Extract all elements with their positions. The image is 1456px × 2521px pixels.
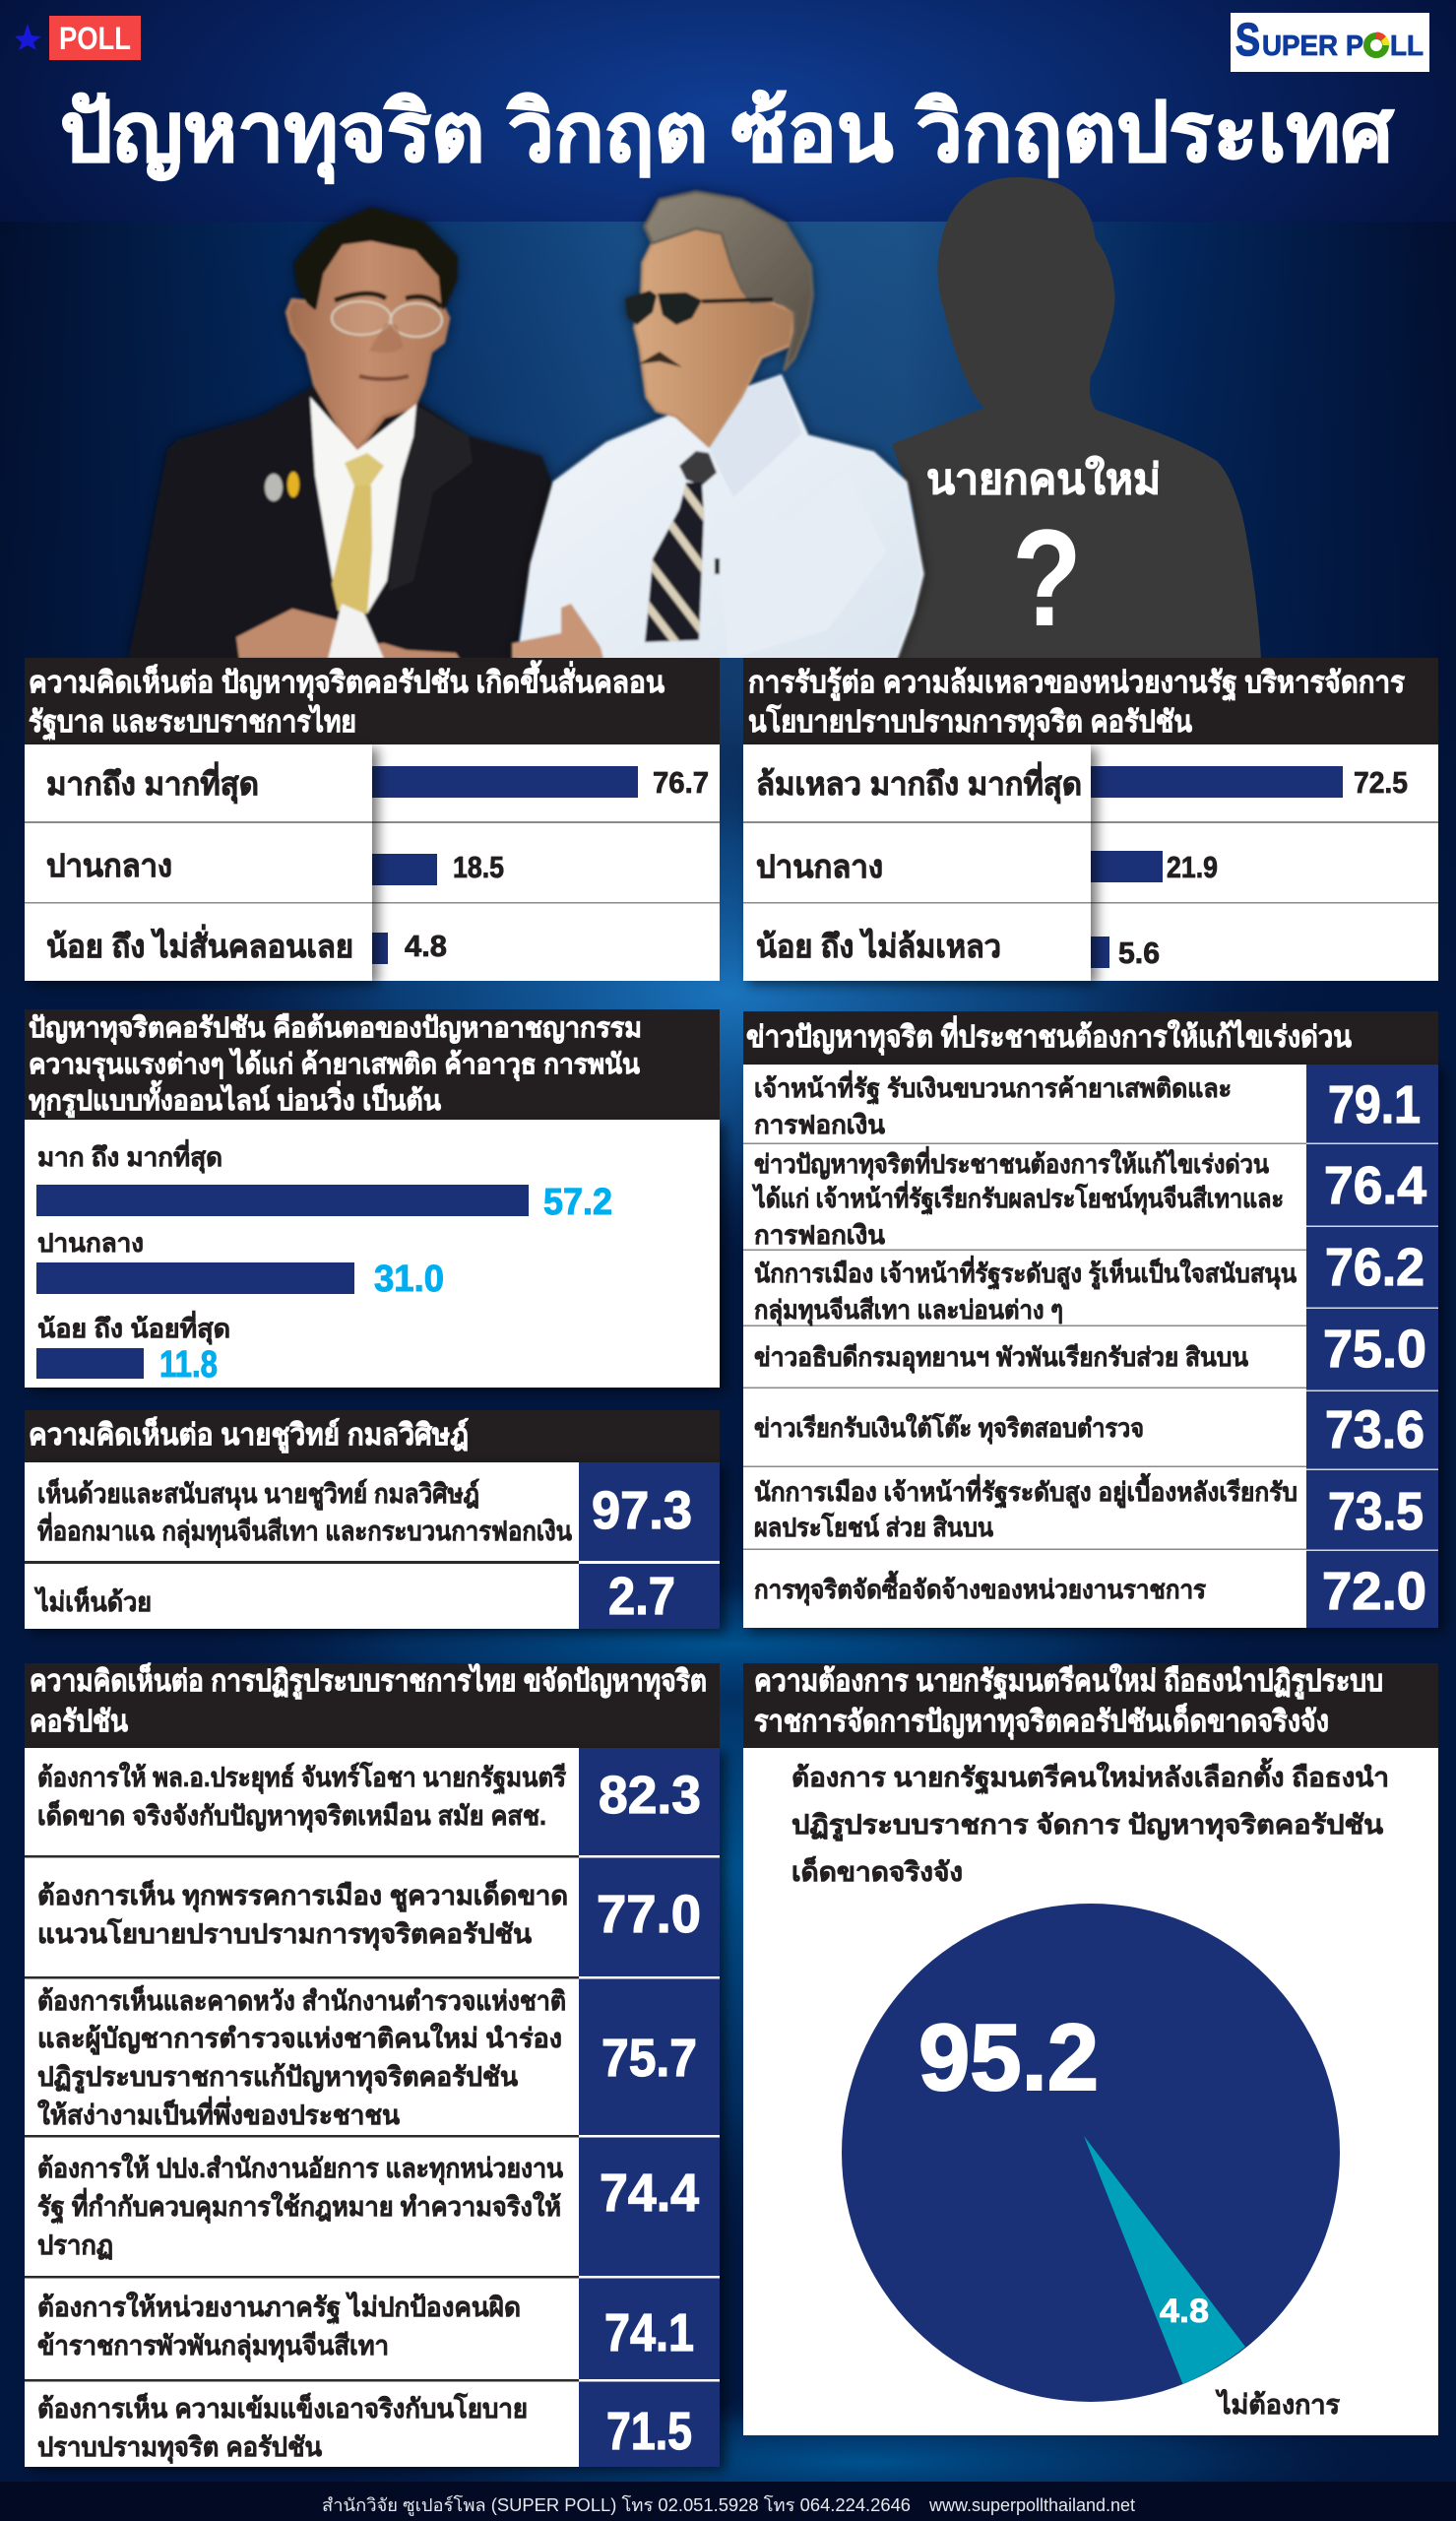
table: 77.0 xyxy=(597,1885,701,1944)
body background xyxy=(743,1748,1438,2435)
bar chart: 72.5 xyxy=(1354,765,1408,800)
pie label: ไม่ต้องการ xyxy=(1215,2389,1340,2420)
pie chart: 4.8 xyxy=(1160,2293,1209,2330)
table: ข้าราชการพัวพันกลุ่มทุนจีนสีเทา xyxy=(37,2331,389,2362)
poll badge: POLL xyxy=(59,21,131,56)
bar chart xyxy=(25,1120,720,1388)
heading: ราชการจัดการปัญหาทุจริตคอรัปชันเด็ดขาดจริงจัง xyxy=(754,1703,1329,1740)
heading: ความต้องการ นายกรัฐมนตรีคนใหม่ ถือธงนำปฏิรูประบบ xyxy=(754,1663,1383,1701)
heading xyxy=(25,1662,720,1748)
heading: ความคิดเห็นต่อ การปฏิรูประบบราชการไทย ขจัดปัญหาทุจริต xyxy=(30,1662,707,1700)
heading xyxy=(743,658,1438,744)
bar chart: น้อย ถึง น้อยที่สุด xyxy=(37,1310,230,1345)
table: ข่าวอธิบดีกรมอุทยานฯ พัวพันเรียกรับส่วย สินบน xyxy=(754,1342,1248,1374)
heading xyxy=(25,1410,720,1462)
table: ต้องการเห็นและคาดหวัง สำนักงานตำรวจแห่งชาติ xyxy=(37,1983,566,2016)
table: 79.1 xyxy=(1328,1075,1421,1134)
table: 72.0 xyxy=(1322,1562,1426,1621)
pie chart xyxy=(842,1904,1340,2402)
table: เห็นด้วยและสนับสนุน นายชูวิทย์ กมลวิศิษฎ์ xyxy=(37,1476,479,1511)
logo: super poll: S xyxy=(1235,14,1260,65)
heading: ความคิดเห็นต่อ นายชูวิทย์ กมลวิศิษฎ์ xyxy=(29,1416,469,1454)
table: นักการเมือง เจ้าหน้าที่รัฐระดับสูง รู้เห็นเป็นใจสนับสนุน xyxy=(754,1255,1297,1291)
table: 73.6 xyxy=(1325,1400,1424,1459)
bar chart: ปานกลาง xyxy=(37,1228,144,1258)
bar chart: 76.7 xyxy=(653,765,709,800)
table: 74.1 xyxy=(604,2303,694,2362)
panel: urgent news xyxy=(743,1011,1438,1628)
table: ที่ออกมาแฉ กลุ่มทุนจีนสีเทา และกระบวนการฟอกเงิน xyxy=(37,1512,572,1548)
bar chart: ปานกลาง xyxy=(46,848,172,883)
table: ให้สง่างามเป็นที่พึ่งของประชาชน xyxy=(37,2096,401,2130)
heading: คอรัปชัน xyxy=(30,1706,128,1738)
table: ต้องการเห็น ทุกพรรคการเมือง ชูความเด็ดขาด xyxy=(37,1878,568,1912)
table: 74.4 xyxy=(600,2164,699,2223)
table: 73.5 xyxy=(1328,1482,1424,1541)
table: นักการเมือง เจ้าหน้าที่รัฐระดับสูง อยู่เบื้องหลังเรียกรับ xyxy=(754,1472,1298,1510)
table: ได้แก่ เจ้าหน้าที่รัฐเรียกรับผลประโยชน์ทุนจีนสีเทาและ xyxy=(751,1180,1284,1216)
bar chart: 11.8 xyxy=(159,1344,218,1386)
heading: ทุกรูปแบบทั้งออนไลน์ บ่อนวิ่ง เป็นต้น xyxy=(29,1079,441,1118)
table: ต้องการให้ ปปง.สำนักงานอัยการ และทุกหน่วยงาน xyxy=(37,2153,563,2185)
chart question xyxy=(791,1757,1389,1887)
table: และผู้บัญชาการตำรวจแห่งชาติคนใหม่ นำร่อง xyxy=(37,2023,562,2055)
chart question: เด็ดขาดจริงจัง xyxy=(791,1854,963,1887)
table: 97.3 xyxy=(592,1481,692,1540)
chart question: ปฏิรูประบบราชการ จัดการ ปัญหาทุจริตคอรัปชัน xyxy=(791,1810,1384,1842)
footer xyxy=(0,2482,1456,2521)
table: 71.5 xyxy=(606,2402,692,2461)
table: การทุจริตจัดซื้อจัดจ้างของหน่วยงานราชการ xyxy=(754,1570,1206,1606)
table xyxy=(743,1065,1438,1628)
footer: www.superpollthailand.net xyxy=(928,2495,1135,2515)
heading: การรับรู้ต่อ ความล้มเหลวของหน่วยงานรัฐ บริหารจัดการ xyxy=(748,667,1405,702)
table: ข่าวเรียกรับเงินใต้โต๊ะ ทุจริตสอบตำรวจ xyxy=(754,1412,1144,1445)
table: 2.7 xyxy=(608,1567,675,1626)
footer: สำนักวิจัย ซูเปอร์โพล (SUPER POLL) โทร 02.051.5928 โทร 064.224.2646 xyxy=(322,2494,911,2516)
panel: agency failure xyxy=(743,658,1438,981)
heading: ข่าวปัญหาทุจริต ที่ประชาชนต้องการให้แก้ไขเร่งด่วน xyxy=(746,1015,1352,1056)
title: ปัญหาทุจริต วิกฤต ซ้อน วิกฤตประเทศ xyxy=(60,86,1395,184)
table: ต้องการให้หน่วยงานภาครัฐ ไม่ปกป้องคนผิด xyxy=(37,2292,521,2325)
logo: super poll: UPER xyxy=(1262,31,1338,62)
logo: super poll: LL xyxy=(1390,31,1424,62)
table: ต้องการเห็น ความเข้มแข็งเอาจริงกับนโยบาย xyxy=(37,2391,528,2424)
table: ต้องการให้ พล.อ.ประยุทธ์ จันทร์โอชา นายกรัฐมนตรี xyxy=(37,1761,566,1795)
pie chart: 95.2 xyxy=(918,2005,1099,2110)
header band xyxy=(24,0,1432,222)
table: กลุ่มทุนจีนสีเทา และบ่อนต่าง ๆ xyxy=(754,1295,1063,1326)
heading: นโยบายปราบปรามการทุจริต คอรัปชัน xyxy=(748,703,1192,741)
logo: super poll: P xyxy=(1346,31,1363,62)
logo: super poll xyxy=(1231,13,1429,72)
table: รัฐ ที่กำกับควบคุมการใช้กฎหมาย ทำความจริงให้ xyxy=(37,2187,561,2225)
heading: ความคิดเห็นต่อ ปัญหาทุจริตคอรัปชัน เกิดขึ้นสั่นคลอน xyxy=(29,660,665,701)
heading: ความรุนแรงต่างๆ ได้แก่ ค้ายาเสพติด ค้าอาวุธ การพนัน xyxy=(29,1048,640,1081)
table: ปราบปรามทุจริต คอรัปชัน xyxy=(37,2432,323,2464)
table: ปรากฏ xyxy=(37,2230,113,2260)
bar chart: 31.0 xyxy=(374,1259,444,1300)
bar chart: ล้มเหลว มากถึง มากที่สุด xyxy=(756,761,1082,805)
question mark: ? xyxy=(1012,500,1082,655)
bar chart: 57.2 xyxy=(543,1182,612,1223)
table: 76.4 xyxy=(1324,1156,1426,1215)
table: 76.2 xyxy=(1325,1238,1424,1297)
photo: man in black suit xyxy=(128,209,554,659)
bar chart: มาก ถึง มากที่สุด xyxy=(37,1138,222,1174)
table: 75.0 xyxy=(1323,1320,1426,1379)
bar chart xyxy=(25,744,720,981)
heading xyxy=(743,1011,1438,1065)
heading xyxy=(25,1009,720,1120)
bar chart: มากถึง มากที่สุด xyxy=(46,761,259,805)
table: 75.7 xyxy=(601,2029,697,2088)
bar chart: ปานกลาง xyxy=(756,849,883,884)
table xyxy=(25,1748,720,2467)
table: ปฏิรูประบบราชการแก้ปัญหาทุจริตคอรัปชัน xyxy=(37,2062,519,2094)
bar chart: 21.9 xyxy=(1167,850,1218,884)
panel: root of crime xyxy=(25,1009,720,1388)
table: ข่าวปัญหาทุจริตที่ประชาชนต้องการให้แก้ไขเร่งด่วน xyxy=(754,1145,1269,1181)
silhouette label: นายกคนใหม่ xyxy=(926,455,1161,502)
table: เจ้าหน้าที่รัฐ รับเงินขบวนการค้ายาเสพติดและ xyxy=(754,1069,1232,1106)
panel: government stability xyxy=(25,658,720,981)
photo: man in white shirt and sunglasses xyxy=(512,192,922,660)
bar chart xyxy=(743,744,1438,981)
table: เด็ดขาด จริงจังกับปัญหาทุจริตเหมือน สมัย คสช. xyxy=(37,1798,546,1833)
chart question: ต้องการ นายกรัฐมนตรีคนใหม่หลังเลือกตั้ง ถือธงนำ xyxy=(791,1757,1389,1795)
poll badge xyxy=(49,16,141,60)
table: ไม่เห็นด้วย xyxy=(33,1584,152,1617)
table xyxy=(25,1462,720,1629)
heading xyxy=(25,658,720,744)
panel: civil service reform xyxy=(25,1662,720,2467)
bar chart: 18.5 xyxy=(453,850,504,884)
panel: new prime minister demand xyxy=(743,1663,1438,2435)
heading: ปัญหาทุจริตคอรัปชัน คือต้นตอของปัญหาอาชญากรรม xyxy=(29,1012,642,1045)
bar chart: 4.8 xyxy=(405,929,447,963)
table: 82.3 xyxy=(599,1766,701,1825)
bar chart: น้อย ถึง ไม่ล้มเหลว xyxy=(756,928,1001,964)
bar chart: 5.6 xyxy=(1118,936,1160,970)
bar chart: น้อย ถึง ไม่สั่นคลอนเลย xyxy=(46,924,353,964)
panel: opinion on chuvit xyxy=(25,1410,720,1629)
silhouette: new prime minister xyxy=(892,177,1261,658)
icon: star xyxy=(15,24,41,50)
heading: รัฐบาล และระบบราชการไทย xyxy=(29,704,356,742)
table: การฟอกเงิน xyxy=(754,1220,885,1250)
table: แนวนโยบายปราบปรามการทุจริตคอรัปชัน xyxy=(37,1917,533,1951)
table: การฟอกเงิน xyxy=(754,1110,885,1139)
heading xyxy=(743,1663,1438,1748)
table: ผลประโยชน์ ส่วย สินบน xyxy=(754,1512,993,1542)
